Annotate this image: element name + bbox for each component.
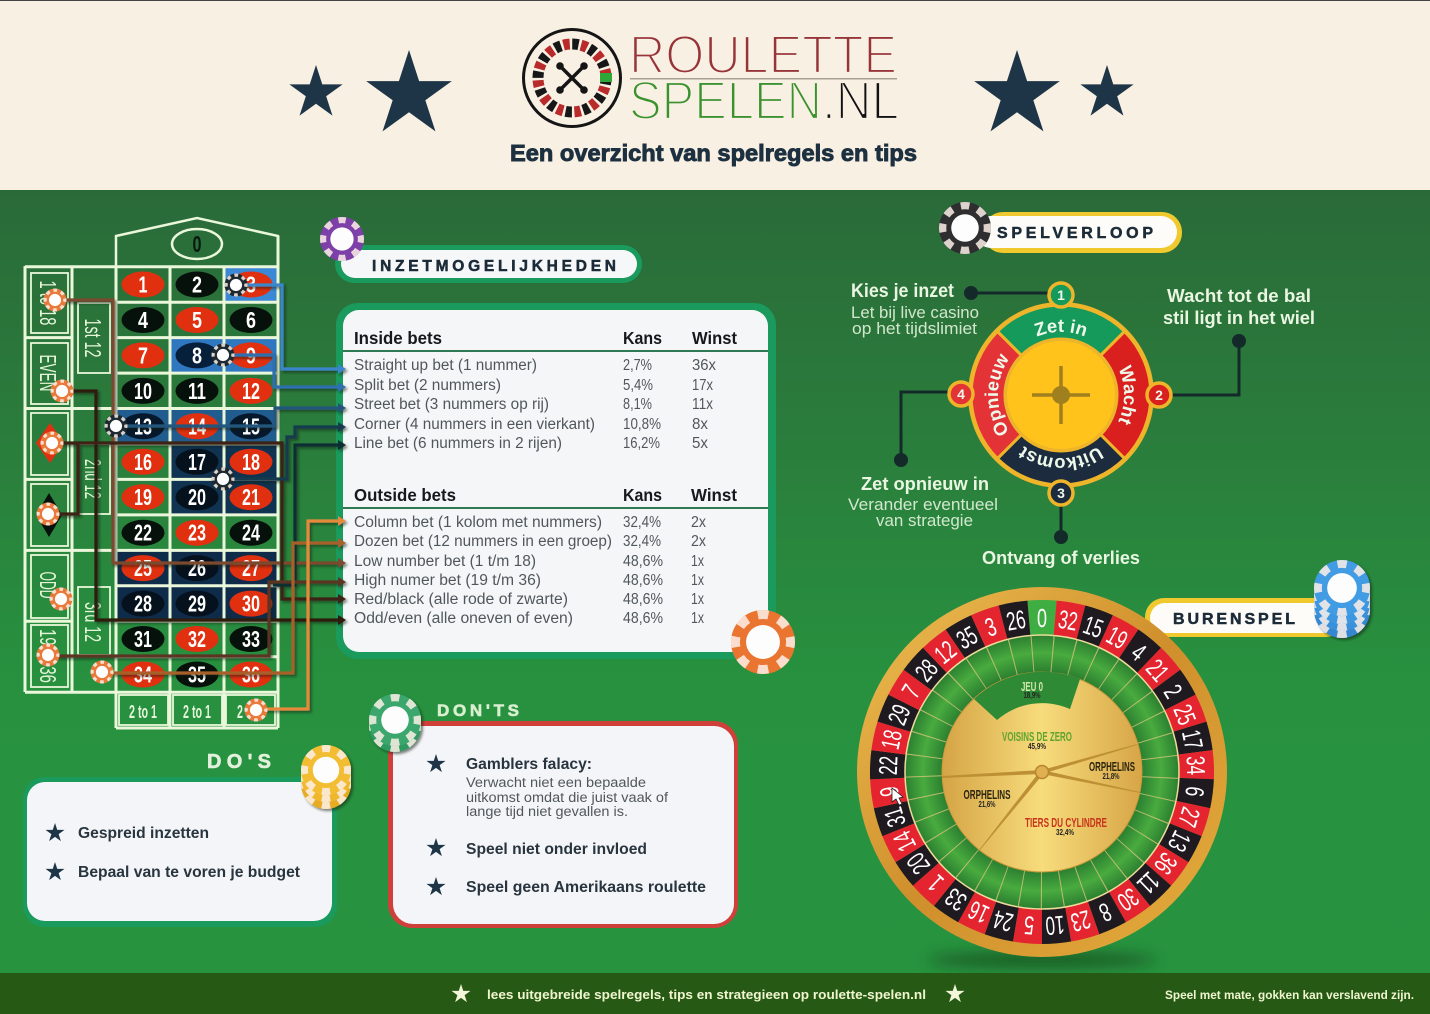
inside bets rows: 10,8%: [623, 416, 661, 433]
red and black diamonds: [36, 423, 64, 537]
number ring: 19: [1101, 620, 1133, 655]
wheel sector labels: TIERS DU CYLINDRE: [1025, 815, 1107, 830]
number ring: 7: [895, 679, 926, 703]
number ring: 32: [1056, 604, 1080, 637]
inside bets rows: [354, 357, 716, 452]
segment: wacht: [1100, 332, 1149, 456]
segment: uitkomst: [1000, 434, 1124, 483]
number ring: 29: [882, 700, 917, 729]
number ring: 6: [1179, 785, 1210, 798]
icon: cursor: [892, 788, 903, 805]
highlighted cells: [116, 267, 278, 621]
outside bets rows: 32,4%: [623, 514, 661, 531]
footer: [0, 973, 1430, 1014]
callout 2: wacht tot de bal: [1147, 285, 1315, 407]
logo text: [629, 25, 899, 131]
inside bets rows: Straight up bet (1 nummer): [354, 357, 537, 374]
spoke right lower: [1042, 770, 1140, 793]
subtitle: Een overzicht van spelregels en tips: [510, 140, 917, 166]
callout 4: zet opnieuw in: [848, 382, 998, 530]
number ring: 12: [928, 635, 962, 670]
inside bets rows: Line bet (6 nummers in 2 rijen): [354, 435, 562, 452]
inside bets header: Kans: [623, 328, 662, 348]
spoke lower left: [979, 771, 1044, 850]
segment: opnieuw: [972, 332, 1022, 458]
side labels: 1st 12: [80, 318, 106, 358]
side labels: 2nd 12: [80, 459, 106, 499]
outside bets rows: 32,4%: [623, 533, 661, 550]
board numbers: 16: [134, 449, 152, 475]
callout 3: ontvang of verlies: 3: [1057, 485, 1065, 501]
wheel sector labels: 21,8%: [1102, 772, 1120, 781]
outside bets rows: [354, 514, 706, 627]
callout 4: zet opnieuw in: van strategie: [876, 512, 973, 530]
outside bets rows: 2x: [691, 514, 706, 531]
board numbers: 15: [242, 413, 260, 439]
board numbers: 8: [192, 342, 202, 368]
number ring: [870, 600, 1214, 945]
outside bets rows: 1x: [691, 553, 704, 570]
inside bets header: [343, 328, 768, 352]
heading: spelverloop: SPELVERLOOP: [997, 225, 1153, 242]
number ring: 15: [1079, 609, 1107, 644]
number ring: 3: [981, 611, 1000, 643]
number ring: 31: [878, 804, 912, 831]
inside bets rows: 11x: [692, 396, 713, 413]
board numbers: 24: [242, 520, 260, 546]
wheel sector labels: 18,9%: [1024, 691, 1040, 700]
arrow: straight up: [236, 285, 346, 374]
icon: green chip: [369, 694, 421, 752]
zero cell: 0: [192, 231, 202, 257]
wheel sector labels: 32,4%: [1056, 828, 1074, 837]
heading: don'ts: DON'TS: [437, 701, 519, 720]
panel: don'ts: [388, 721, 738, 928]
arrows from chips to bet rows: [48, 285, 346, 709]
don't item 2: Speel niet onder invloed: [466, 841, 647, 858]
don't item 1: Gamblers falacy:: [466, 756, 592, 773]
heading: inzetmogelijkheden: [335, 245, 642, 283]
segment: zet in: Zet in: [1034, 319, 1086, 336]
outside bets rows: Dozen bet (12 nummers in een groep): [354, 533, 612, 550]
logo: [524, 25, 899, 131]
inside bets header: Inside bets: [354, 328, 442, 348]
arrow: street: [116, 403, 346, 426]
number ring: 25: [1167, 700, 1202, 729]
callout 1: kies je inzet: Let bij live casino: [851, 304, 979, 322]
board numbers: 7: [138, 342, 148, 368]
number ring: 23: [1068, 904, 1094, 938]
outside bets rows: 48,6%: [623, 553, 663, 570]
board numbers: 14: [188, 413, 206, 439]
outside bets header: Outside bets: [354, 485, 456, 505]
inside bets rows: Split bet (2 nummers): [354, 377, 501, 394]
side labels: 2 to 1: [129, 702, 157, 722]
callout 2: wacht tot de bal: Wacht tot de bal: [1167, 285, 1311, 306]
heading: burenspel: BURENSPEL: [1173, 611, 1295, 628]
number ring: 34: [1180, 755, 1211, 776]
callout 3: ontvang of verlies: [982, 481, 1140, 568]
panel: bets table: [336, 303, 776, 659]
side cell frames: [31, 273, 275, 725]
heading: spelverloop: [975, 212, 1182, 253]
number ring: 9: [874, 785, 905, 798]
do item 2: Bepaal van te voren je budget: [78, 864, 301, 881]
number ring: 27: [1172, 804, 1206, 831]
header stars right: [974, 50, 1134, 131]
number ring: 17: [1176, 727, 1209, 752]
heading: do's: DO'S: [207, 751, 271, 773]
number ring: 18: [875, 727, 908, 752]
callout 2: wacht tot de bal: stil ligt in het wiel: [1163, 307, 1315, 328]
board numbers: 19: [134, 484, 152, 510]
number ring: 14: [887, 826, 922, 857]
number ring: 22: [873, 755, 904, 776]
number ring: 35: [951, 620, 983, 655]
board numbers: 3: [246, 272, 256, 298]
don't item 3: Speel geen Amerikaans roulette: [466, 879, 706, 896]
wheel sector labels: VOISINS DE ZERO: [1002, 729, 1072, 744]
don't item 1: uitkomst omdat die juist vaak of: [466, 790, 668, 805]
page background: [0, 190, 1430, 974]
callout 1: kies je inzet: Kies je inzet: [851, 281, 955, 302]
board numbers: 35: [188, 662, 206, 688]
number ring: 4: [1125, 637, 1152, 667]
roulette betting board: [25, 218, 278, 728]
icon: orange chip: [731, 610, 795, 674]
number ring: 20: [900, 847, 936, 880]
footer star right: [945, 984, 965, 1002]
callout 4: zet opnieuw in: 4: [957, 386, 965, 402]
number ring: 10: [1044, 910, 1066, 941]
board numbers: 9: [246, 342, 256, 368]
wheel sector labels: 45,9%: [1028, 742, 1046, 751]
board numbers: 11: [188, 378, 206, 404]
inside bets rows: 8x: [692, 416, 708, 433]
sector spokes: [942, 744, 1140, 850]
inside bets rows: 17x: [692, 377, 713, 394]
segment: zet in: [1000, 307, 1122, 354]
inside bets rows: Street bet (3 nummers op rij): [354, 396, 549, 413]
zero cell: [116, 218, 278, 266]
arrow: column: [256, 516, 346, 709]
outside bets rows: 1x: [691, 572, 704, 589]
don't item 2: [426, 838, 647, 858]
board numbers: 1: [138, 272, 148, 298]
board numbers: 13: [134, 413, 152, 439]
callout 2: wacht tot de bal: 2: [1155, 387, 1163, 403]
number ring: 11: [1131, 866, 1166, 901]
inside bets rows: 5,4%: [623, 377, 653, 394]
game flow wheel: [968, 302, 1154, 488]
callout 1: kies je inzet: 1: [1057, 287, 1065, 303]
outside bets rows: Odd/even (alle oneven of even): [354, 610, 573, 627]
don't item 1: Verwacht niet een bepaalde: [466, 775, 646, 790]
wheel sector labels: JEU 0: [1021, 679, 1043, 694]
arrow: line bet: [273, 440, 346, 585]
board numbers: 21: [242, 484, 260, 510]
board numbers: 10: [134, 378, 152, 404]
board numbers: 28: [134, 591, 152, 617]
header band: [0, 0, 1430, 190]
don't item 1: [426, 754, 668, 819]
side labels: ODD: [35, 572, 61, 598]
side labels: 19 to 36: [35, 629, 61, 683]
footer star left: [451, 984, 471, 1002]
board numbers: 31: [134, 626, 152, 652]
side labels: [35, 280, 265, 722]
side labels: 2 to 1: [183, 702, 211, 722]
board numbers: 30: [242, 591, 260, 617]
callout 1: kies je inzet: op het tijdslimiet: [852, 320, 977, 338]
board numbers: 17: [188, 449, 206, 475]
outside bets rows: 2x: [691, 533, 706, 550]
panel: do's: [23, 777, 337, 927]
number ring: 28: [909, 653, 944, 687]
green pocket ring: [905, 635, 1179, 909]
side labels: 1 to 18: [35, 280, 61, 326]
board numbers: 4: [138, 307, 148, 333]
board numbers: 6: [246, 307, 256, 333]
arrow: odd even: [62, 391, 346, 625]
number ring: 16: [964, 895, 993, 930]
inside bets rows: 5x: [692, 435, 708, 452]
segment: wacht: Wacht: [1118, 364, 1136, 426]
arrow: dozen: [102, 538, 346, 673]
wheel centre: [1007, 341, 1115, 449]
header stars left: [289, 50, 452, 131]
jeu 0 sector: [974, 672, 1080, 720]
gold centre: [942, 672, 1142, 872]
inside bets rows: 36x: [692, 357, 716, 374]
side labels: 2 to 1: [237, 702, 265, 722]
grid lines: [25, 236, 278, 728]
inside bets rows: 16,2%: [623, 435, 660, 452]
roulette wheel: [857, 587, 1227, 957]
outside bets rows: Red/black (alle rode of zwarte): [354, 591, 568, 608]
outside bets header: Winst: [691, 485, 737, 505]
number ellipses: [122, 272, 272, 688]
logo text: SPELEN: [629, 71, 822, 131]
callout 4: zet opnieuw in: Verander eventueel: [848, 496, 998, 514]
board numbers: 27: [242, 555, 260, 581]
outside bets header: [343, 485, 768, 509]
wheel sector labels: ORPHELINS: [964, 787, 1011, 802]
board numbers: [134, 272, 260, 688]
wheel sector labels: [964, 679, 1135, 837]
spoke right upper: [1042, 744, 1137, 774]
wheel sector labels: 21,6%: [978, 800, 996, 809]
callout 3: ontvang of verlies: Ontvang of verlies: [982, 547, 1140, 568]
number ring: 13: [1162, 826, 1197, 857]
board numbers: 5: [192, 307, 202, 333]
inside bets rows: 8,1%: [623, 396, 652, 413]
number ring: 2: [1158, 679, 1189, 703]
arrow: split: [223, 355, 346, 392]
outside bets rows: Low number bet (1 t/m 18): [354, 553, 536, 570]
board numbers: 26: [188, 555, 206, 581]
board numbers: 33: [242, 626, 260, 652]
board numbers: 36: [242, 662, 260, 688]
number ring: 0: [1037, 603, 1047, 633]
number ring: 33: [940, 882, 972, 917]
icon: black chip: [939, 202, 991, 254]
outside bets rows: Column bet (1 kolom met nummers): [354, 514, 602, 531]
inside bets header: Winst: [692, 328, 737, 348]
side labels: EVEN: [35, 354, 61, 392]
board numbers: 12: [242, 378, 260, 404]
footer disclaimer: Speel met mate, gokken kan verslavend zijn.: [1165, 990, 1414, 1002]
do item 1: Gespreid inzetten: [78, 825, 209, 842]
callout 4: zet opnieuw in: Zet opnieuw in: [861, 473, 989, 494]
board numbers: 25: [134, 555, 152, 581]
arrow: corner: [223, 422, 346, 479]
arrow: high number: [48, 577, 346, 656]
segment: uitkomst: Uitkomst: [1018, 446, 1104, 470]
number ring: 24: [990, 904, 1016, 938]
arrow: low number: [55, 300, 346, 568]
outside bets rows: High numer bet (19 t/m 36): [354, 572, 541, 589]
number ring: 36: [1148, 847, 1184, 880]
icon: yellow chip stack: [301, 745, 351, 809]
side labels: 3rd 12: [80, 602, 106, 642]
icon: purple chip: [320, 217, 364, 261]
outside bets rows: 48,6%: [623, 610, 663, 627]
heading: inzetmogelijkheden: INZETMOGELIJKHEDEN: [372, 258, 616, 275]
small chips on the board: [36, 274, 268, 722]
number ring: 26: [1004, 604, 1028, 637]
board numbers: 29: [188, 591, 206, 617]
segment: opnieuw: Opnieuw: [984, 353, 1008, 436]
number ring: 1: [921, 869, 949, 897]
icon: blue chip stack: [1314, 560, 1370, 638]
outside bets rows: 1x: [691, 591, 704, 608]
board numbers: 34: [134, 662, 152, 688]
callout 1: kies je inzet: [851, 281, 1073, 338]
outside bets header: Kans: [623, 485, 662, 505]
wheel hub: [1036, 766, 1048, 778]
arrow: red black: [48, 443, 346, 604]
spoke left: [942, 770, 1042, 778]
don't item 1: lange tijd niet gevallen is.: [466, 804, 628, 819]
number ring: 5: [1023, 910, 1035, 941]
inside bets rows: Corner (4 nummers in een vierkant): [354, 416, 595, 433]
board numbers: 2: [192, 272, 202, 298]
number ring: 30: [1112, 882, 1144, 917]
logo text: .NL: [822, 71, 899, 131]
inside bets rows: 2,7%: [623, 357, 652, 374]
board numbers: 18: [242, 449, 260, 475]
wheel sector labels: ORPHELINS: [1089, 759, 1135, 774]
number ring: 8: [1095, 897, 1116, 928]
board numbers: 20: [188, 484, 206, 510]
wheel shadow: [927, 952, 1157, 968]
board numbers: 23: [188, 520, 206, 546]
logo wheel icon: [524, 30, 620, 126]
outside bets rows: 1x: [691, 610, 704, 627]
outside bets rows: 48,6%: [623, 591, 663, 608]
logo text: ROULETTE: [629, 25, 897, 85]
board numbers: 32: [188, 626, 206, 652]
number ring: 21: [1140, 653, 1175, 687]
board numbers: 22: [134, 520, 152, 546]
footer link text: lees uitgebreide spelregels, tips en strategieen op roulette-spelen.nl: [487, 987, 926, 1002]
outside bets rows: 48,6%: [623, 572, 663, 589]
heading: burenspel: [1145, 598, 1345, 637]
